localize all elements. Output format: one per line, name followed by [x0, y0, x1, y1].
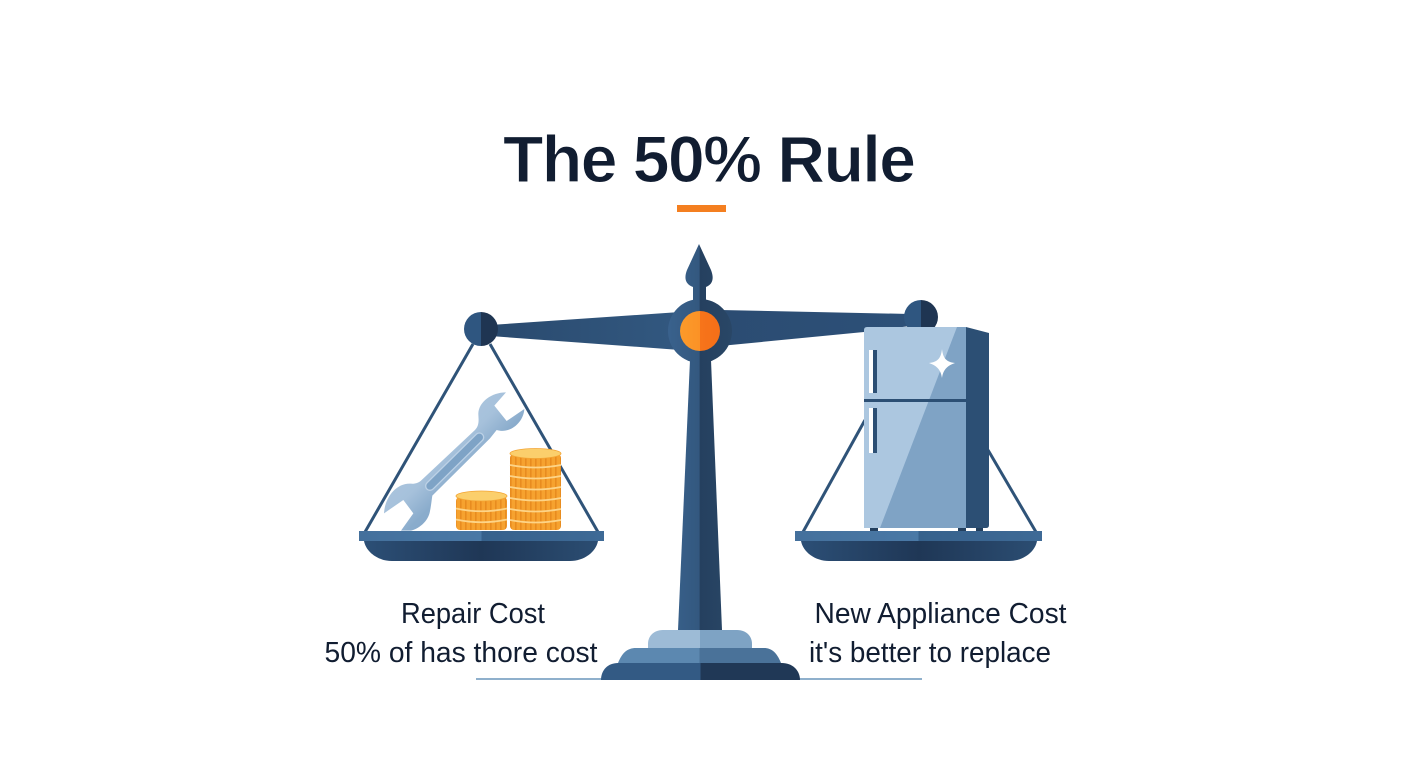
- center hub: [668, 299, 732, 363]
- lower door handle: [869, 408, 877, 453]
- left label: repair cost: 50% of has thore cost: [324, 637, 598, 669]
- central post: [678, 360, 722, 630]
- left pivot knob: [464, 312, 498, 346]
- fridge feet: [870, 527, 983, 531]
- left pan strings: [365, 344, 598, 532]
- icon: refrigerator: [864, 327, 989, 531]
- ground line: [476, 678, 922, 680]
- fridge side: [966, 327, 989, 528]
- icon: sparkle: [929, 349, 955, 378]
- right beam arm: [720, 310, 910, 346]
- icon: wrench: [384, 392, 524, 531]
- icon: small coin stack: [456, 491, 507, 530]
- right label: new appliance cost: it's better to replace: [809, 637, 1051, 669]
- fridge door divider: [864, 399, 966, 402]
- left pan: [359, 531, 604, 561]
- fridge door shading: [880, 327, 966, 528]
- base steps: [601, 630, 800, 680]
- icon: tall coin stack: [510, 448, 561, 530]
- finial: [685, 244, 713, 302]
- title: The 50% Rule: [503, 122, 916, 196]
- right label: new appliance cost: [809, 598, 1066, 669]
- title accent bar: [677, 205, 726, 212]
- upper door handle: [869, 350, 877, 393]
- right pan strings: [803, 420, 1036, 532]
- right label: new appliance cost: New Appliance Cost: [814, 598, 1066, 630]
- left label: repair cost: Repair Cost: [401, 598, 545, 630]
- right pan: [795, 531, 1042, 561]
- left beam arm: [490, 312, 680, 350]
- orange hub center: [680, 311, 720, 351]
- right pivot knob: [904, 300, 938, 334]
- balance scale: [359, 244, 1042, 680]
- left label: repair cost: [324, 598, 598, 669]
- fridge front: [864, 327, 966, 528]
